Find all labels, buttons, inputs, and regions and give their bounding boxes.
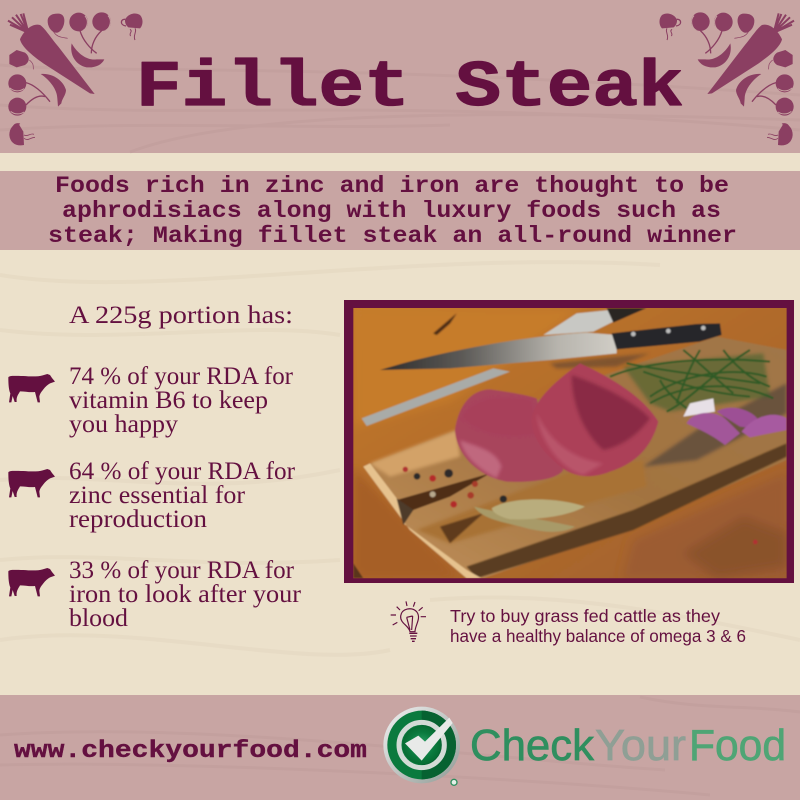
- sharpening steel: [362, 368, 510, 426]
- website url: www.checkyourfood.com: [14, 738, 367, 765]
- vitamin B6 text: [69, 361, 293, 438]
- footer grain: [0, 697, 800, 795]
- intro text: [48, 173, 737, 249]
- logo wordmark: Check: [470, 721, 595, 770]
- bay leaves: [474, 507, 575, 532]
- vitamin B6 text: 74 % of your RDA for: [69, 361, 293, 390]
- right steak: [532, 363, 658, 476]
- intro text: aphrodisiacs along with luxury foods such as: [62, 198, 721, 224]
- zinc text: reproduction: [69, 504, 207, 533]
- intro text: Foods rich in zinc and iron are thought to be: [55, 173, 729, 199]
- logo wordmark: Your: [595, 721, 686, 770]
- zinc text: zinc essential for: [69, 480, 246, 509]
- left vegetable ornament: [8, 12, 143, 145]
- photo: steak on cutting board: [350, 305, 790, 582]
- right vegetable ornament: [659, 12, 794, 145]
- intro text: steak; Making fillet steak an all-round winner: [48, 223, 737, 249]
- iron text: 33 % of your RDA for: [69, 555, 294, 584]
- zinc text: [69, 456, 296, 533]
- footer band: [0, 695, 800, 800]
- left steak: [455, 389, 563, 482]
- header band: [0, 0, 800, 153]
- logo badge: [383, 707, 460, 785]
- zinc text: 64 % of your RDA for: [69, 456, 296, 485]
- fact: iron: [8, 555, 302, 632]
- wood grain texture: [0, 262, 800, 655]
- photo frame: [344, 300, 794, 583]
- icon: cow: [8, 469, 55, 497]
- fact: vitamin B6: [8, 361, 293, 438]
- header grain: [0, 65, 800, 152]
- iron text: [69, 555, 302, 632]
- logo wordmark: [470, 721, 786, 770]
- tip text: have a healthy balance of omega 3 & 6: [450, 626, 746, 646]
- tip: [391, 601, 746, 646]
- vitamin B6 text: vitamin B6 to keep: [69, 385, 268, 414]
- tip text: Try to buy grass fed cattle as they: [450, 606, 720, 626]
- icon: lightbulb: [391, 601, 426, 641]
- title: Fillet Steak: [136, 52, 684, 125]
- table: [350, 305, 790, 582]
- vitamin B6 text: you happy: [69, 409, 178, 438]
- iron text: blood: [69, 603, 128, 632]
- rosemary: [623, 353, 770, 412]
- iron text: iron to look after your: [69, 579, 302, 608]
- peppercorns: [403, 467, 408, 472]
- intro band: [0, 171, 800, 250]
- logo wordmark: Food: [689, 721, 786, 770]
- icon: cow: [8, 568, 55, 596]
- icon: cow: [8, 374, 55, 402]
- fact: zinc: [8, 456, 296, 533]
- knife: [380, 333, 617, 370]
- logo: [383, 707, 786, 785]
- tip text: [450, 606, 746, 646]
- red onion: [683, 398, 715, 417]
- portion heading: A 225g portion has:: [69, 300, 293, 329]
- cutting board: [363, 337, 787, 578]
